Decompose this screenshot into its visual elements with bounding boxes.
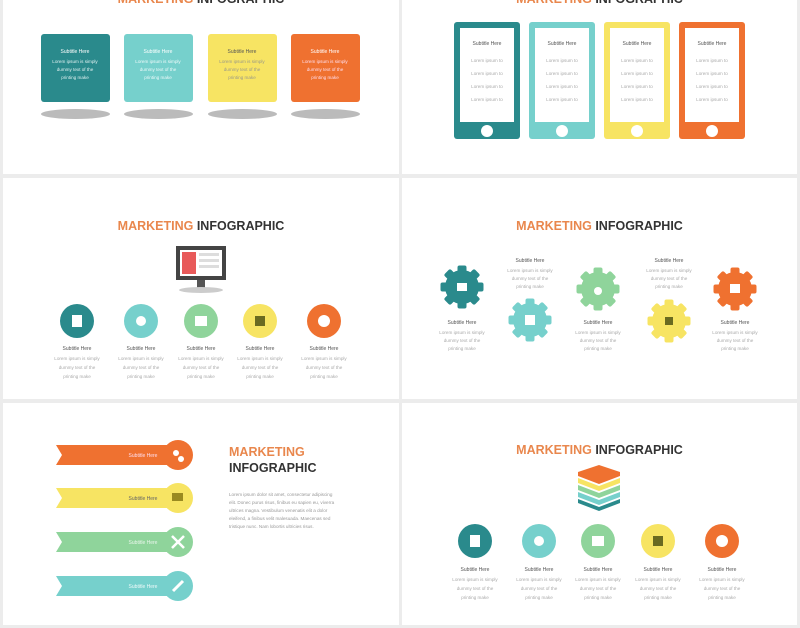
circles row bbox=[452, 524, 745, 600]
panel: layers bbox=[402, 403, 797, 625]
gears: Lorem ipsum is simply bbox=[646, 268, 692, 273]
body text: Lorem ipsum dolor sit amet, consectetur adipiscing elit. Donec purus risus, finibus eu sapien eu, viverra ultrices magna. Vestibulum venenatis elit a dolor eleifend, a finibus velit malesuada. Maecenas sed tristique nunc. Nam lobortis ultricies risus. bbox=[229, 492, 334, 529]
gears: dummy text of the bbox=[444, 338, 481, 343]
phone devices: Lorem ipsum to bbox=[471, 84, 503, 89]
gears: dummy text of the bbox=[512, 276, 549, 281]
circles row bbox=[54, 304, 347, 379]
circles row: printing make bbox=[310, 374, 338, 379]
phone devices: Lorem ipsum to bbox=[621, 58, 653, 63]
circles row: Lorem ipsum is simply bbox=[301, 356, 347, 361]
title: MARKETING INFOGRAPHIC bbox=[118, 219, 284, 233]
gears: dummy text of the bbox=[651, 276, 688, 281]
phone devices: Lorem ipsum to bbox=[546, 71, 578, 76]
circles row: dummy text of the bbox=[59, 365, 96, 370]
phone devices: Lorem ipsum to bbox=[621, 71, 653, 76]
phone devices bbox=[454, 22, 745, 139]
gears bbox=[439, 258, 758, 351]
phone devices: Lorem ipsum to bbox=[696, 84, 728, 89]
gears: dummy text of the bbox=[580, 338, 617, 343]
circles row: Subtitle Here bbox=[246, 346, 275, 352]
panel: boxes bbox=[3, 0, 399, 174]
phone devices: Lorem ipsum to bbox=[546, 84, 578, 89]
title: MARKETING INFOGRAPHIC bbox=[516, 443, 683, 457]
circles row: dummy text of the bbox=[183, 365, 220, 370]
title: MARKETING INFOGRAPHIC bbox=[516, 219, 683, 233]
box cards: Lorem ipsum is simply dummy text of the printing make bbox=[219, 59, 265, 80]
icon: monitor bbox=[176, 246, 226, 293]
phone devices: Lorem ipsum to bbox=[696, 58, 728, 63]
ribbon list: Subtitle Here bbox=[129, 584, 158, 590]
heading bbox=[229, 445, 316, 475]
ribbon list: Subtitle Here bbox=[129, 496, 158, 502]
phone devices: Lorem ipsum to bbox=[546, 97, 578, 102]
ribbon list bbox=[56, 440, 193, 601]
phone devices: Lorem ipsum to bbox=[471, 58, 503, 63]
panel: phones bbox=[402, 0, 797, 174]
box cards: Subtitle Here bbox=[311, 49, 339, 55]
box cards: Subtitle Here bbox=[144, 49, 172, 55]
circles row: Subtitle Here bbox=[708, 567, 737, 573]
circles row: Lorem ipsum is simply bbox=[178, 356, 224, 361]
gears: Subtitle Here bbox=[584, 320, 613, 326]
circles row: printing make bbox=[187, 374, 215, 379]
ribbon list: Subtitle Here bbox=[129, 453, 158, 459]
gears: Lorem ipsum is simply bbox=[439, 330, 485, 335]
circles row: printing make bbox=[525, 595, 553, 600]
circles row: Subtitle Here bbox=[461, 567, 490, 573]
gears: Subtitle Here bbox=[448, 320, 477, 326]
heading: INFOGRAPHIC bbox=[229, 461, 316, 475]
phone devices: Lorem ipsum to bbox=[546, 58, 578, 63]
gears: Lorem ipsum is simply bbox=[712, 330, 758, 335]
circles row: printing make bbox=[63, 374, 91, 379]
phone devices: Lorem ipsum to bbox=[471, 71, 503, 76]
panel: gears bbox=[402, 178, 797, 399]
circles row: printing make bbox=[644, 595, 672, 600]
circles row: printing make bbox=[708, 595, 736, 600]
gears: Lorem ipsum is simply bbox=[575, 330, 621, 335]
circles row: printing make bbox=[127, 374, 155, 379]
panel: ribbons bbox=[3, 403, 399, 625]
circles row: dummy text of the bbox=[521, 586, 558, 591]
gears: Subtitle Here bbox=[516, 258, 545, 264]
box cards: Lorem ipsum is simply dummy text of the printing make bbox=[302, 59, 348, 80]
circles row: Subtitle Here bbox=[63, 346, 92, 352]
gears: printing make bbox=[584, 346, 612, 351]
circles row: dummy text of the bbox=[306, 365, 343, 370]
box cards: Lorem ipsum is simply dummy text of the printing make bbox=[52, 59, 98, 80]
phone devices: Subtitle Here bbox=[548, 41, 577, 47]
panel: monitor circles bbox=[3, 178, 399, 399]
phone devices: Subtitle Here bbox=[473, 41, 502, 47]
gears: printing make bbox=[721, 346, 749, 351]
circles row: Subtitle Here bbox=[127, 346, 156, 352]
circles row: dummy text of the bbox=[242, 365, 279, 370]
phone devices: Lorem ipsum to bbox=[621, 97, 653, 102]
circles row: dummy text of the bbox=[457, 586, 494, 591]
circles row: printing make bbox=[246, 374, 274, 379]
phone devices: Subtitle Here bbox=[698, 41, 727, 47]
phone devices: Subtitle Here bbox=[623, 41, 652, 47]
gears: Subtitle Here bbox=[655, 258, 684, 264]
circles row: Subtitle Here bbox=[584, 567, 613, 573]
circles row: Subtitle Here bbox=[644, 567, 673, 573]
circles row: Lorem ipsum is simply bbox=[54, 356, 100, 361]
gears: printing make bbox=[655, 284, 683, 289]
phone devices: Lorem ipsum to bbox=[696, 71, 728, 76]
icon: layer stack bbox=[578, 465, 620, 511]
circles row: Subtitle Here bbox=[187, 346, 216, 352]
box cards bbox=[41, 34, 360, 119]
gears: printing make bbox=[448, 346, 476, 351]
phone devices: Lorem ipsum to bbox=[471, 97, 503, 102]
circles row: dummy text of the bbox=[123, 365, 160, 370]
circles row: printing make bbox=[584, 595, 612, 600]
circles row: printing make bbox=[461, 595, 489, 600]
phone devices: Lorem ipsum to bbox=[696, 97, 728, 102]
box cards: Lorem ipsum is simply dummy text of the printing make bbox=[135, 59, 181, 80]
circles row: dummy text of the bbox=[580, 586, 617, 591]
gears: printing make bbox=[516, 284, 544, 289]
gears: Subtitle Here bbox=[721, 320, 750, 326]
circles row: Lorem ipsum is simply bbox=[452, 577, 498, 582]
gears: Lorem ipsum is simply bbox=[507, 268, 553, 273]
box cards: Subtitle Here bbox=[61, 49, 89, 55]
circles row: dummy text of the bbox=[640, 586, 677, 591]
phone devices: Lorem ipsum to bbox=[621, 84, 653, 89]
circles row: Lorem ipsum is simply bbox=[516, 577, 562, 582]
circles row: Subtitle Here bbox=[525, 567, 554, 573]
heading: MARKETING bbox=[229, 445, 305, 459]
circles row: Lorem ipsum is simply bbox=[237, 356, 283, 361]
circles row: Lorem ipsum is simply bbox=[635, 577, 681, 582]
ribbon list: Subtitle Here bbox=[129, 540, 158, 546]
gears: dummy text of the bbox=[717, 338, 754, 343]
circles row: Lorem ipsum is simply bbox=[699, 577, 745, 582]
circles row: Lorem ipsum is simply bbox=[118, 356, 164, 361]
circles row: dummy text of the bbox=[704, 586, 741, 591]
circles row: Subtitle Here bbox=[310, 346, 339, 352]
circles row: Lorem ipsum is simply bbox=[575, 577, 621, 582]
box cards: Subtitle Here bbox=[228, 49, 256, 55]
